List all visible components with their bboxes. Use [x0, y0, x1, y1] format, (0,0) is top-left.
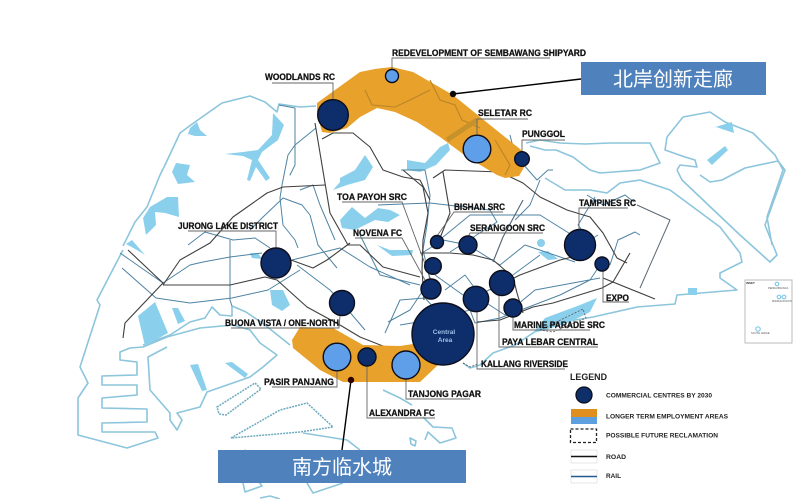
callout: southern waterfront city: 南方临水城 [292, 456, 392, 479]
label: Paya Lebar: PAYA LEBAR CENTRAL [502, 337, 598, 347]
centre: Punggol [515, 152, 529, 166]
centre: Marine Parade [504, 299, 522, 317]
road network [123, 123, 670, 350]
label: Sembawang: REDEVELOPMENT OF SEMBAWANG SHIPYARD [392, 48, 586, 58]
legend: commercial centre text: COMMERCIAL CENTRES BY 2030 [606, 392, 712, 400]
legend: employment swatch [571, 409, 597, 424]
inset map: SOUTH LEDGE [751, 331, 770, 335]
centre: Buona Vista [330, 290, 354, 316]
label: Buona Vista: BUONA VISTA / ONE-NORTH [225, 318, 339, 328]
inset map [745, 280, 792, 343]
centre: Tanjong Pagar [392, 351, 420, 379]
legend: road text: ROAD [606, 454, 626, 461]
labels [178, 48, 636, 418]
legend: commercial centre marker [576, 387, 592, 403]
coastline [78, 96, 785, 499]
leader lines and label underlines [188, 58, 629, 418]
callout: southern waterfront city [218, 377, 466, 483]
label: Serangoon: SERANGOON SRC [470, 223, 545, 233]
roads over corridor [365, 80, 510, 175]
label: Punggol: PUNGGOL [522, 129, 565, 139]
legend heading: LEGEND [570, 372, 607, 382]
label: Kallang Riverside: KALLANG RIVERSIDE [481, 359, 568, 369]
inset map: INSET [746, 281, 755, 285]
inset map: MIDDLE ROCKS [772, 299, 792, 303]
dashed reclamation outlines [463, 309, 586, 367]
label: Expo: EXPO [606, 293, 629, 303]
legend: road swatch [571, 450, 597, 463]
centre: Jurong Lake [261, 248, 291, 278]
centre: Paya Lebar [490, 270, 514, 296]
label: Bishan: BISHAN SRC [454, 202, 505, 212]
centre: Pasir Panjang [323, 343, 351, 371]
map of Singapore [78, 58, 792, 499]
commercial centres [261, 100, 609, 366]
legend: employment text: LONGER TERM EMPLOYMENT AREAS [606, 414, 729, 420]
Central Area label: Area [438, 337, 453, 344]
label: Pasir Panjang: PASIR PANJANG [264, 377, 334, 387]
legend: reclamation text: POSSIBLE FUTURE RECLAMATION [606, 432, 718, 440]
centre: Novena [421, 279, 441, 299]
label: Woodlands: WOODLANDS RC [265, 72, 335, 82]
centre: Kallang Riverside [463, 286, 489, 312]
centre: Seletar [463, 135, 491, 163]
reservoirs and water bodies [126, 113, 734, 391]
centre: Tampines [564, 230, 596, 260]
centre: Serangoon [459, 236, 477, 254]
legend: rail swatch [571, 470, 597, 483]
legend: rail text: RAIL [606, 473, 621, 480]
rail lines [120, 105, 640, 333]
label: Tanjong Pagar: TANJONG PAGAR [408, 389, 481, 399]
inset map: PEDRA BRANCA [768, 286, 789, 290]
label: Marine Parade: MARINE PARADE SRC [514, 320, 605, 330]
centre: Toa Payoh [425, 258, 441, 274]
legend: reclamation swatch [570, 429, 596, 442]
label: Toa Payoh: TOA PAYOH SRC [337, 192, 407, 202]
centre: Sembawang [386, 70, 398, 82]
label: Seletar: SELETAR RC [478, 108, 532, 118]
label: Jurong Lake: JURONG LAKE DISTRICT [178, 221, 278, 231]
label: Tampines: TAMPINES RC [579, 198, 636, 208]
centre: Central Area [412, 303, 474, 365]
label: Novena: NOVENA FC [353, 228, 402, 238]
centre: Alexandra [358, 348, 376, 366]
centre: Expo [595, 257, 609, 271]
longer term employment circles [323, 70, 491, 379]
employment area: north coast corridor band [317, 67, 530, 178]
callout: north coast innovation corridor [450, 62, 766, 97]
islands with dotted outline [217, 383, 333, 438]
employment area: southern waterfront band [292, 327, 438, 382]
legend [570, 372, 729, 483]
Central Area label: Central [433, 329, 455, 336]
centre: Woodlands [318, 100, 348, 130]
Central Area label [433, 329, 455, 344]
label: Alexandra: ALEXANDRA FC [369, 408, 435, 418]
centre: Bishan [430, 236, 444, 248]
callout: north coast innovation corridor: 北岸创新走廊 [613, 68, 733, 91]
